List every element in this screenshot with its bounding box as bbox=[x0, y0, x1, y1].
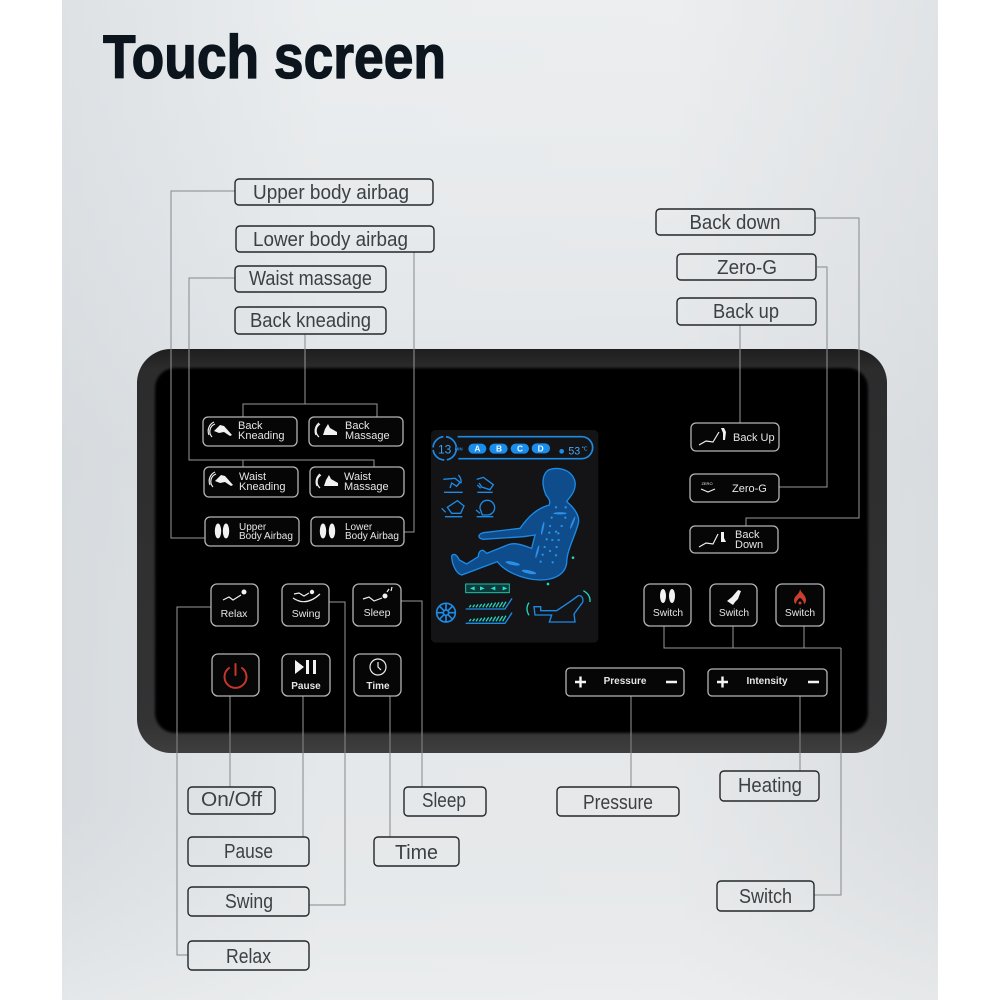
button: Intensity bbox=[708, 669, 827, 696]
label: Sleep: Sleep bbox=[422, 790, 466, 812]
button: Back Down: Down bbox=[735, 539, 763, 551]
label: Time: Time bbox=[395, 842, 438, 864]
button: Back Kneading: Back bbox=[238, 420, 263, 432]
button: Switch airbag: Switch bbox=[653, 608, 683, 619]
button: Swing: Swing bbox=[292, 608, 320, 620]
label: Upper body airbag: Upper body airbag bbox=[253, 182, 409, 204]
LCD massage icons bbox=[442, 475, 495, 517]
button: Switch heat: Switch bbox=[785, 608, 815, 619]
button: Pressure bbox=[566, 668, 684, 696]
LCD fan icon bbox=[437, 603, 455, 622]
label: Zero-G: Zero-G bbox=[717, 257, 777, 279]
label: On/Off: On/Off bbox=[201, 789, 262, 811]
button: Pause bbox=[282, 654, 330, 696]
button: Back Up: Back Up bbox=[733, 432, 775, 444]
LCD temperature bbox=[559, 446, 587, 458]
button: Sleep: Sleep bbox=[364, 607, 391, 619]
button: Switch foot: Switch bbox=[719, 608, 749, 619]
label: Swing: Swing bbox=[225, 891, 273, 913]
LCD temperature: ℃ bbox=[581, 447, 587, 453]
button: Zero-G: Zero-G bbox=[732, 483, 767, 495]
button: Waist Massage: Waist bbox=[344, 471, 371, 483]
button: Zero-G: ZERO bbox=[701, 481, 713, 486]
button: Waist Kneading bbox=[204, 467, 298, 497]
button: Waist Kneading: Kneading bbox=[239, 481, 286, 493]
label: Back kneading: Back kneading bbox=[250, 310, 371, 332]
button: Back Down: Back bbox=[735, 529, 760, 541]
LCD timer: MIN bbox=[455, 446, 463, 451]
button: Upper Body Airbag: Body Airbag bbox=[239, 531, 293, 542]
button: Time bbox=[354, 654, 401, 696]
label: Zero-G bbox=[677, 254, 816, 280]
LCD intensity bars bbox=[466, 598, 512, 623]
label: Pause: Pause bbox=[224, 841, 273, 863]
button: Relax: Relax bbox=[221, 608, 248, 620]
title: Touch screen bbox=[103, 23, 446, 91]
label: Relax: Relax bbox=[226, 946, 271, 968]
LCD timer bbox=[433, 437, 463, 460]
button: Back Massage: Back bbox=[345, 420, 370, 432]
button: Back Up bbox=[691, 423, 779, 451]
label: Heating bbox=[720, 771, 819, 801]
button: Back Massage bbox=[309, 417, 403, 446]
button: Back Kneading bbox=[203, 417, 297, 446]
button: Swing bbox=[282, 584, 329, 626]
button: Back Kneading: Kneading bbox=[238, 430, 284, 442]
button: Relax bbox=[211, 584, 258, 626]
label: On/Off bbox=[188, 787, 275, 814]
label: Lower body airbag: Lower body airbag bbox=[253, 229, 408, 251]
LCD mode pills A B C D: A bbox=[474, 444, 480, 454]
LCD position indicator bbox=[466, 584, 509, 593]
button: Zero-G bbox=[690, 474, 779, 502]
button: Time: Time bbox=[366, 681, 390, 692]
label: Back down bbox=[656, 209, 815, 235]
label: Back up: Back up bbox=[713, 301, 779, 323]
button: Upper Body Airbag bbox=[205, 517, 299, 546]
LCD timer: 13 bbox=[438, 442, 452, 456]
button: Back Massage: Massage bbox=[345, 430, 390, 442]
button: Lower Body Airbag: Lower bbox=[345, 522, 373, 533]
button: Waist Massage bbox=[310, 467, 404, 497]
button: Lower Body Airbag: Body Airbag bbox=[345, 531, 399, 542]
LCD screen bbox=[431, 430, 598, 643]
button: Power bbox=[212, 654, 259, 696]
label: Heating: Heating bbox=[738, 775, 802, 797]
LCD chair icon bbox=[527, 591, 590, 622]
button: Pause: Pause bbox=[291, 681, 321, 692]
button: Waist Massage: Massage bbox=[344, 481, 389, 493]
label: Pause bbox=[188, 837, 309, 866]
button: Switch foot bbox=[710, 584, 757, 626]
label: Switch: Switch bbox=[739, 886, 792, 908]
button: Lower Body Airbag bbox=[311, 517, 404, 546]
LCD mode pills A B C D: B bbox=[496, 444, 502, 454]
LCD top frame bbox=[458, 437, 593, 459]
button: Back Down bbox=[690, 526, 778, 553]
control panel bbox=[137, 349, 887, 753]
button: Switch airbag bbox=[644, 584, 691, 626]
label: Pressure: Pressure bbox=[583, 792, 653, 814]
connector lines outside and over panel bbox=[171, 191, 859, 955]
button: Switch heat bbox=[776, 584, 824, 626]
label: Back down: Back down bbox=[690, 212, 780, 234]
label: Time bbox=[374, 837, 459, 866]
LCD mode pills A B C D bbox=[468, 443, 550, 454]
button: Pressure: Pressure bbox=[604, 676, 647, 687]
LCD temperature: 53 bbox=[568, 446, 580, 458]
button: Intensity: Intensity bbox=[746, 676, 788, 687]
label: Sleep bbox=[404, 787, 486, 816]
button: Upper Body Airbag: Upper bbox=[239, 522, 267, 533]
label: Waist massage: Waist massage bbox=[249, 268, 372, 290]
LCD mode pills A B C D: C bbox=[517, 444, 523, 454]
label: Switch bbox=[717, 881, 814, 911]
LCD teal dots bbox=[547, 556, 574, 585]
LCD body figure bbox=[452, 469, 579, 580]
button: Sleep bbox=[353, 584, 401, 626]
label: Swing bbox=[188, 887, 309, 916]
LCD mode pills A B C D: D bbox=[538, 443, 544, 453]
label: Back up bbox=[677, 298, 816, 325]
button: Waist Kneading: Waist bbox=[239, 471, 266, 483]
label: Relax bbox=[188, 941, 309, 970]
label: Pressure bbox=[557, 787, 679, 816]
LCD airbag marks bbox=[505, 506, 576, 575]
